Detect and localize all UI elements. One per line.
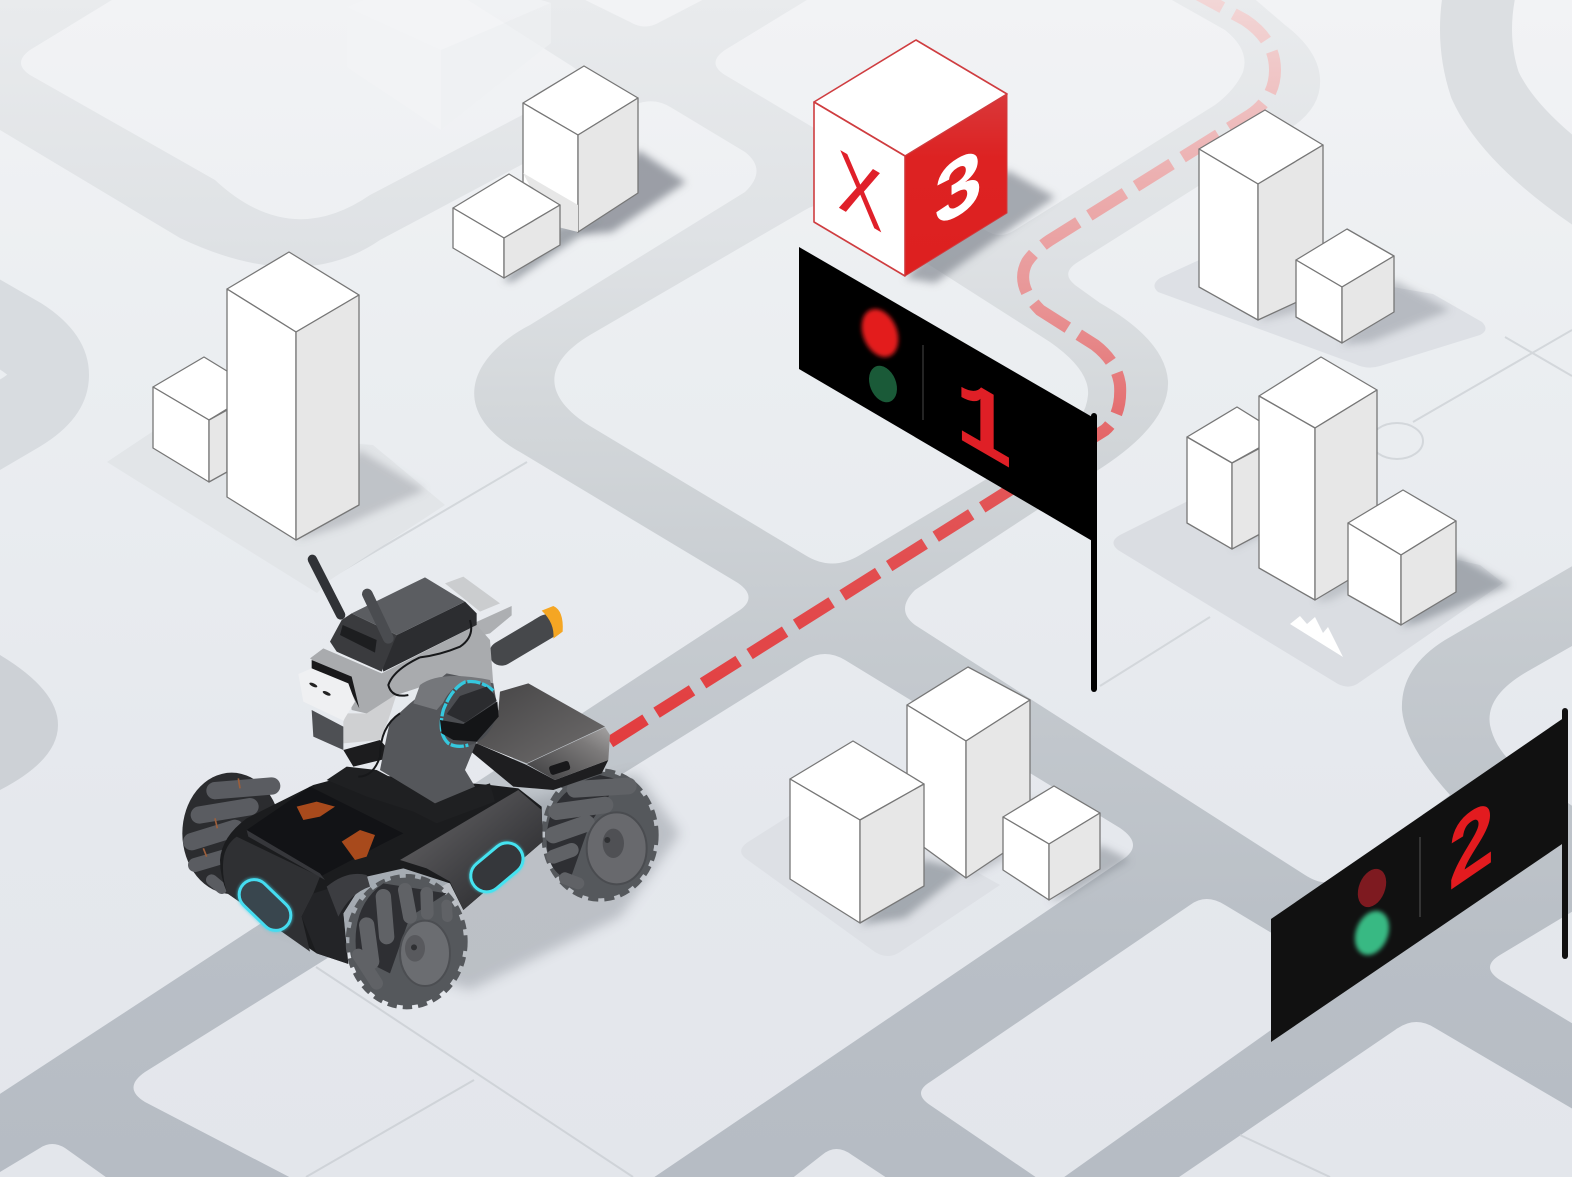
- knob bottom: [440, 702, 499, 742]
- gimbal disc: [429, 672, 507, 755]
- block: left large: [0, 101, 756, 1107]
- pad: upper right buildings: [1154, 255, 1486, 368]
- orange parts under lid: [297, 802, 375, 860]
- black slot: [312, 660, 359, 708]
- rail arm: [473, 606, 512, 637]
- building shadows: [297, 150, 1510, 925]
- front grey block: [343, 694, 397, 743]
- flag panel: [1271, 715, 1568, 1042]
- block: bottom small centre: [790, 1149, 890, 1177]
- gun barrel: [502, 627, 547, 653]
- front LED glow: [233, 873, 297, 937]
- flag 2 with traffic light: [1271, 711, 1568, 1042]
- icon: white mountain marks: [1290, 616, 1343, 657]
- road: left lower blob: [0, 655, 58, 790]
- label: 1: 1: [955, 357, 1013, 499]
- block: top left: [21, 0, 580, 219]
- building group: bottom: [790, 667, 1100, 923]
- flag panel: [799, 247, 1094, 542]
- rear hood top: [477, 683, 605, 763]
- rear hood lower: [465, 743, 608, 790]
- block: right edge: [1490, 895, 1572, 1040]
- lid front strip: [247, 830, 325, 880]
- rear hood port: [548, 760, 571, 776]
- divider: [1419, 837, 1421, 917]
- robot shadow: [270, 773, 680, 990]
- ghost building: [347, 0, 551, 130]
- label: 2: 2: [1446, 778, 1496, 922]
- side panel: [400, 790, 543, 910]
- curved roads at page edges: [0, 0, 1572, 790]
- block: centre: [554, 204, 1088, 564]
- pad: mid right buildings: [1113, 500, 1503, 687]
- side LED glow: [464, 836, 529, 898]
- chassis base: [220, 773, 543, 964]
- green light off: [864, 362, 902, 406]
- divider: [922, 345, 924, 420]
- building group: left: [153, 252, 359, 540]
- cable: [358, 620, 471, 777]
- white sensor: [298, 668, 355, 721]
- antenna left: [312, 559, 341, 615]
- knob top: [447, 687, 497, 723]
- road: left arc: [0, 290, 50, 460]
- pole: [1562, 711, 1568, 956]
- thin map lines: [306, 330, 1572, 1177]
- gimbal base: [327, 767, 495, 823]
- top rail plate: [445, 577, 500, 612]
- turret and hood, local coordinates: [298, 559, 610, 803]
- flag 1 with traffic light: [799, 247, 1094, 689]
- back left wheel: [182, 773, 281, 894]
- wheel arch: [327, 874, 370, 917]
- block: right large: [905, 0, 1572, 882]
- building group: middle right: [1187, 357, 1456, 625]
- box top face: [352, 577, 465, 635]
- side LED: [464, 836, 529, 898]
- robot: [182, 559, 680, 1007]
- box right face: [382, 602, 477, 672]
- cyan ring: [441, 681, 493, 746]
- pole: [1091, 416, 1097, 689]
- building group: top small: [453, 66, 638, 278]
- grey camera plate: [310, 625, 493, 717]
- block: lower middle: [134, 654, 1133, 1177]
- red cube with X and 3: [814, 40, 1007, 276]
- box front face: [330, 613, 397, 672]
- pad: left buildings: [107, 430, 445, 593]
- label: X: X: [837, 131, 883, 252]
- antenna right: [367, 594, 388, 638]
- red light off: [1352, 865, 1392, 911]
- block: lower right centre: [921, 899, 1338, 1177]
- block: bottom small left: [0, 1144, 110, 1177]
- road: top right arc: [1476, 0, 1572, 200]
- lower dark block: [312, 710, 343, 750]
- front glass lid: [247, 787, 403, 877]
- block: top centre: [716, 0, 1245, 235]
- red dashed route: [610, 0, 1275, 742]
- gimbal arm lighter collar: [413, 676, 493, 710]
- building group: top right: [1199, 110, 1394, 343]
- building pads: [107, 255, 1503, 956]
- heatsink fins: [340, 625, 377, 653]
- right nose panel: [302, 877, 367, 963]
- front nose panel: [223, 837, 320, 952]
- block: lower right: [1160, 1022, 1572, 1177]
- back right wheel: [544, 771, 656, 899]
- front LED: [233, 873, 297, 937]
- label: 3: 3: [932, 130, 984, 256]
- gun tip: [542, 606, 563, 639]
- block: top small: [575, 0, 712, 26]
- pad: bottom buildings: [741, 790, 1000, 956]
- block: far right: [1490, 630, 1572, 825]
- red light on: [855, 303, 905, 363]
- gimbal arm: [380, 673, 498, 803]
- green light on: [1349, 906, 1395, 960]
- rear hood ridge: [527, 727, 610, 780]
- front wheel: [348, 876, 465, 1007]
- black under-block: [343, 740, 395, 767]
